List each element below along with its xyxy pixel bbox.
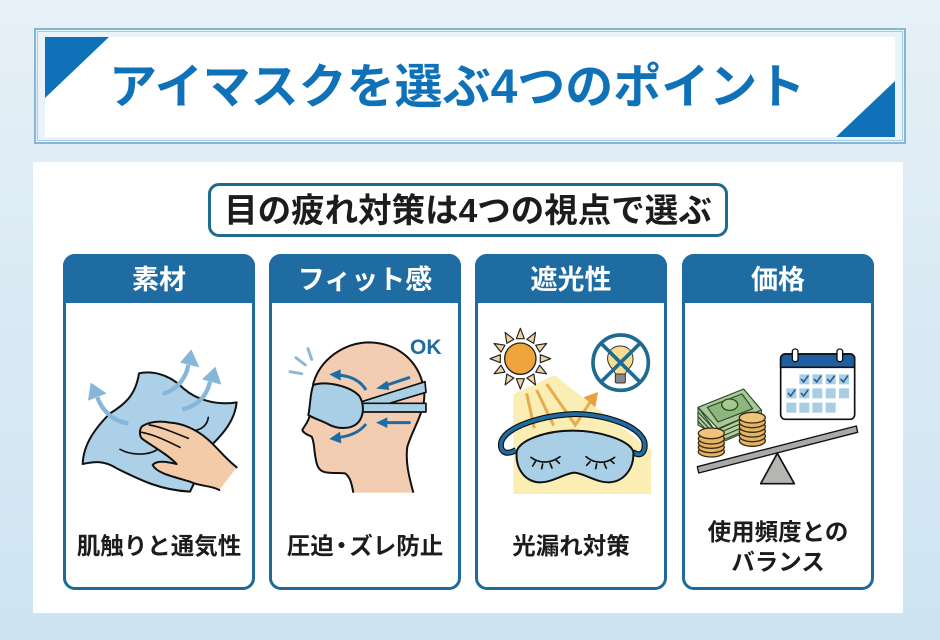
heading: フィット感 (269, 254, 461, 303)
icon: sun, blocked bulb and sleep mask (489, 328, 651, 494)
heading: 価格 (682, 254, 874, 303)
title banner (34, 28, 906, 144)
banner corner triangles (45, 37, 895, 137)
banner inner frame (37, 31, 903, 141)
subtitle pill: 目の疲れ対策は4つの視点で選ぶ (224, 193, 712, 230)
panel: フィット感 (269, 254, 461, 590)
panel: 価格 (682, 254, 874, 590)
icon: money and calendar on a seesaw (696, 348, 858, 484)
main panel (33, 162, 903, 613)
heading: 価格: 価格 (751, 265, 805, 295)
label: 圧迫・ズレ防止: 圧迫・ズレ防止 (287, 533, 443, 559)
icon: head wearing eye mask (288, 336, 442, 493)
heading: 遮光性: 遮光性 (530, 265, 612, 295)
label: 使用頻度とのバランス: 使用頻度との (708, 519, 848, 545)
banner white panel (45, 37, 895, 137)
panel: 遮光性 (475, 254, 667, 590)
icon: cloth and hand with airflow (82, 350, 238, 493)
label: 使用頻度とのバランス: バランス (731, 549, 825, 575)
label: 光漏れ対策: 光漏れ対策 (512, 533, 630, 559)
heading: フィット感: フィット感 (298, 265, 432, 295)
subtitle pill (208, 183, 728, 237)
icon: head wearing eye mask: OK (410, 336, 442, 359)
panel: 素材 (63, 254, 255, 590)
label: 使用頻度とのバランス (708, 519, 848, 575)
heading: 遮光性 (475, 254, 667, 303)
heading: 素材 (63, 254, 255, 303)
heading: 素材: 素材 (132, 265, 186, 295)
label: 肌触りと通気性: 肌触りと通気性 (77, 533, 241, 559)
title: アイマスクを選ぶ4つのポイント (109, 61, 805, 114)
